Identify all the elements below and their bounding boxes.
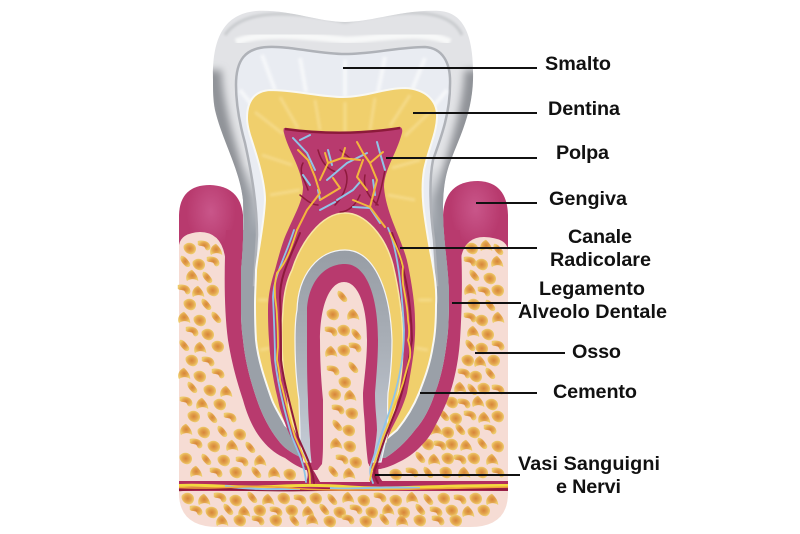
- inner ligament arch: [307, 264, 378, 468]
- nerve and vessel band: [179, 481, 508, 491]
- gums: [179, 181, 508, 280]
- label: Cemento: Cemento: [553, 381, 637, 403]
- label: Osso: Osso: [572, 341, 621, 363]
- label: Legamento Alveolo Dentale: [452, 278, 667, 323]
- root canal nerves and vessels: [273, 228, 412, 483]
- infographic: tooth anatomy: [178, 10, 666, 528]
- inner cementum arch: [295, 250, 392, 462]
- root feet: [304, 465, 383, 482]
- enamel: [236, 47, 450, 285]
- septum bone spots: [325, 291, 362, 479]
- pulp chamber and root canals: [268, 127, 415, 470]
- bone spongy spots: [178, 240, 504, 527]
- label: Smalto: Smalto: [545, 53, 611, 75]
- tooth crown and cementum: [212, 10, 474, 458]
- label: Canale Radicolare: Radicolare: [550, 249, 651, 271]
- label: Vasi Sanguigni e Nervi: Vasi Sanguigni: [518, 453, 660, 475]
- label: Canale Radicolare: [400, 226, 651, 271]
- label: Gengiva: Gengiva: [549, 188, 628, 210]
- pulp nerves and vessels: [293, 135, 385, 230]
- label: Polpa: Polpa: [556, 142, 610, 164]
- periodontal ligament: [225, 230, 462, 469]
- inner bone septum: [315, 282, 373, 482]
- label: Vasi Sanguigni e Nervi: [375, 453, 660, 498]
- label: Dentina: Dentina: [548, 98, 621, 120]
- label: Vasi Sanguigni e Nervi: e Nervi: [556, 476, 621, 498]
- pulp chamber top edge: [285, 128, 400, 133]
- label: Canale Radicolare: Canale: [568, 226, 632, 248]
- label: Legamento Alveolo Dentale: Alveolo Dentale: [518, 301, 667, 323]
- dentin: [247, 88, 437, 440]
- inner dentin arch: [282, 213, 403, 450]
- bone: [179, 232, 508, 527]
- label: Legamento Alveolo Dentale: Legamento: [539, 278, 645, 300]
